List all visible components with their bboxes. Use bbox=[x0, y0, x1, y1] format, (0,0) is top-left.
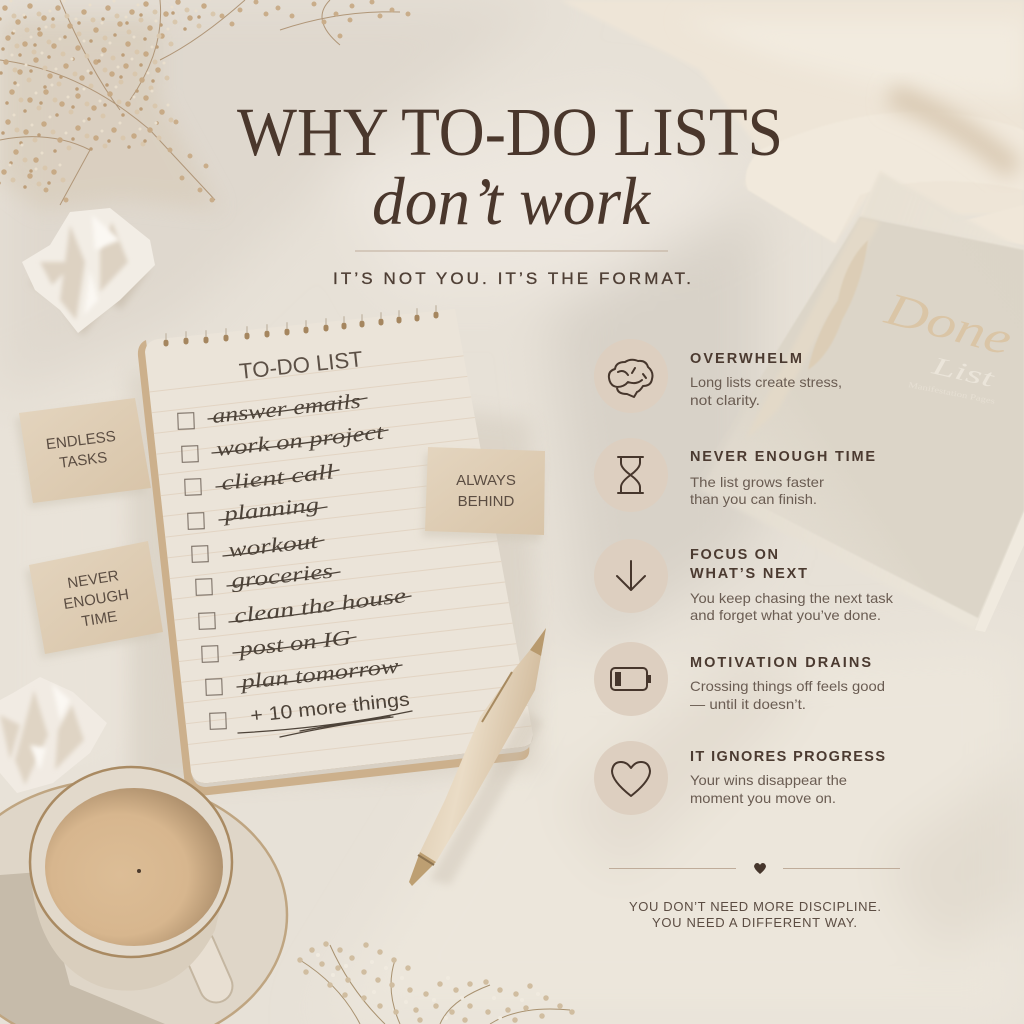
list item: client call bbox=[216, 459, 339, 495]
book subtitle: List: List bbox=[928, 352, 998, 393]
pen bbox=[409, 628, 546, 886]
icon: down arrow bbox=[617, 561, 645, 590]
item: never enough time: NEVER ENOUGH TIME bbox=[690, 449, 875, 465]
list item: post on IG bbox=[233, 625, 356, 661]
item: focus on what's next: FOCUS ON bbox=[690, 547, 778, 563]
book title: Done: Done bbox=[879, 282, 1017, 365]
icon: hourglass bbox=[618, 457, 643, 493]
dried flowers: top left bbox=[0, 0, 408, 210]
sticky note: always behind: ALWAYS bbox=[456, 472, 516, 489]
sticky note: never enough time bbox=[25, 541, 163, 659]
book: Done List journal bbox=[700, 172, 1024, 632]
list item: + 10 more things: + 10 more things bbox=[249, 689, 411, 727]
item: never enough time: The list grows faster bbox=[690, 474, 824, 490]
closing message bbox=[629, 899, 881, 930]
notepad: to-do list bbox=[130, 306, 540, 796]
list item: clean the house bbox=[229, 583, 411, 628]
item: it ignores progress: Your wins disappear the bbox=[690, 772, 847, 788]
sticky note: never enough time: ENOUGH bbox=[62, 586, 130, 613]
item: motivation drains: Crossing things off feels good bbox=[690, 678, 885, 694]
icon: low battery bbox=[611, 668, 651, 690]
sticky note: endless tasks: ENDLESS bbox=[45, 428, 117, 453]
footer divider with heart bbox=[609, 863, 900, 874]
title line 2: don’t work bbox=[372, 163, 652, 239]
item: never enough time bbox=[594, 438, 875, 512]
subtitle with rule: IT’S NOT YOU. IT’S THE FORMAT. bbox=[333, 269, 691, 288]
sticky note: endless tasks bbox=[15, 398, 151, 508]
list item: plan tomorrow: plan tomorrow bbox=[237, 654, 400, 694]
list item: groceries: groceries bbox=[230, 558, 334, 593]
item: focus on what's next: WHAT’S NEXT bbox=[690, 566, 807, 582]
title bbox=[237, 94, 783, 239]
item: it ignores progress: IT IGNORES PROGRESS bbox=[690, 749, 885, 765]
closing message: YOU NEED A DIFFERENT WAY. bbox=[652, 915, 857, 930]
list item: post on IG: post on IG bbox=[236, 625, 352, 661]
item: overwhelm: not clarity. bbox=[690, 392, 760, 408]
item: motivation drains: — until it doesn’t. bbox=[690, 696, 806, 712]
item: focus on what's next bbox=[594, 539, 894, 623]
spiral binding bbox=[166, 306, 436, 344]
cup handle bbox=[198, 945, 216, 986]
list item: clean the house: clean the house bbox=[233, 583, 407, 628]
list item: planning: planning bbox=[220, 492, 320, 526]
title line 1: WHY TO-DO LISTS bbox=[237, 94, 783, 170]
sticky note: always behind bbox=[422, 447, 545, 541]
list item: work on project bbox=[212, 419, 388, 461]
list item: groceries bbox=[227, 558, 340, 593]
item: focus on what's next: and forget what you’ve done. bbox=[690, 607, 881, 623]
item: overwhelm: Long lists create stress, bbox=[690, 374, 842, 390]
item: motivation drains bbox=[594, 642, 885, 716]
list item: answer emails: answer emails bbox=[211, 389, 362, 428]
list item: client call: client call bbox=[220, 459, 335, 495]
list item: + 10 more things bbox=[238, 689, 412, 737]
sticky note: never enough time: NEVER bbox=[66, 567, 120, 592]
sticky note: always behind: BEHIND bbox=[458, 493, 514, 510]
icon: brain bbox=[609, 360, 652, 397]
notepad heading: TO-DO LIST bbox=[238, 346, 364, 384]
list item: workout: workout bbox=[227, 529, 321, 562]
sticky note: endless tasks: TASKS bbox=[58, 449, 108, 472]
blanket: top right bbox=[560, 0, 1024, 245]
list item: workout bbox=[223, 529, 324, 562]
sticky note: never enough time: TIME bbox=[80, 608, 118, 630]
item: overwhelm: OVERWHELM bbox=[690, 351, 802, 367]
checkboxes bbox=[178, 413, 226, 729]
list item: work on project: work on project bbox=[215, 419, 386, 461]
list item: plan tomorrow bbox=[237, 654, 402, 694]
crumpled paper: lower bbox=[0, 677, 107, 793]
icon: heart bbox=[612, 762, 650, 796]
item: focus on what's next: You keep chasing the next task bbox=[690, 590, 894, 606]
item: it ignores progress bbox=[594, 741, 885, 815]
item: motivation drains: MOTIVATION DRAINS bbox=[690, 655, 871, 671]
item: it ignores progress: moment you move on. bbox=[690, 790, 836, 806]
dried flowers: bottom bbox=[300, 944, 572, 1024]
crumpled paper: upper bbox=[22, 208, 155, 336]
item: overwhelm bbox=[594, 339, 842, 413]
closing message: YOU DON’T NEED MORE DISCIPLINE. bbox=[629, 899, 881, 914]
book small caption: Manifestation Pages bbox=[908, 380, 996, 406]
list item: planning bbox=[219, 492, 327, 526]
item: never enough time: than you can finish. bbox=[690, 491, 817, 507]
saucer and coffee cup bbox=[0, 767, 287, 1024]
